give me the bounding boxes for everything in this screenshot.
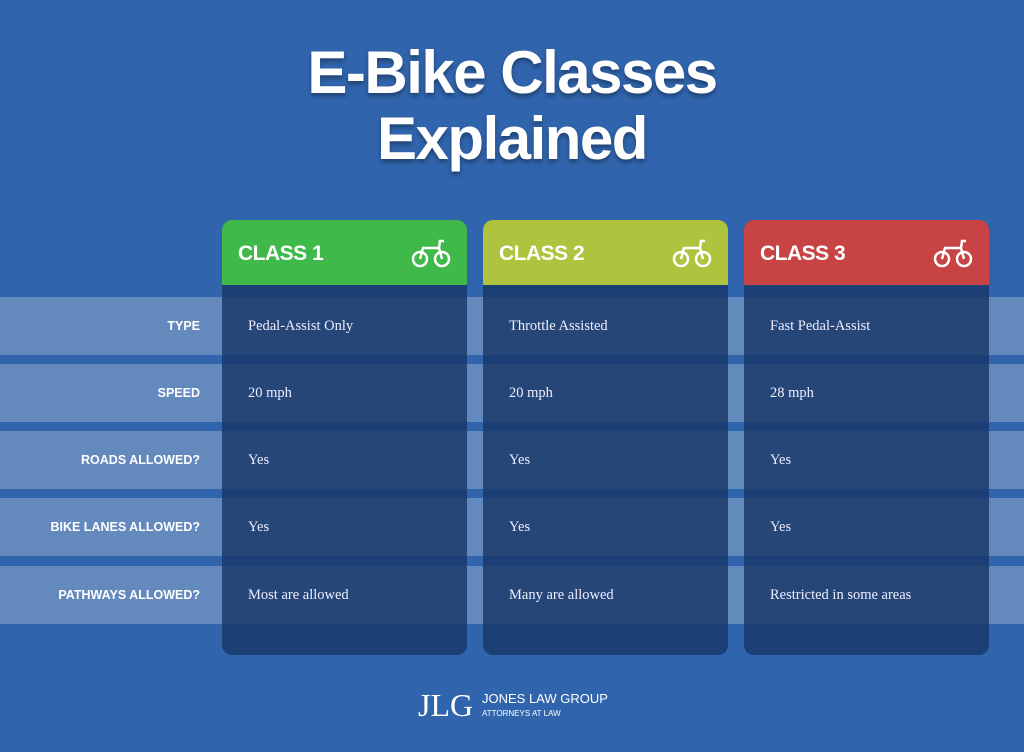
title: Explained — [377, 105, 647, 172]
panel: class 3: 28 mph — [770, 385, 814, 401]
panel: class 1 — [222, 220, 467, 655]
logo — [418, 687, 608, 723]
header: class 3 — [744, 220, 989, 285]
panel: class 3 — [744, 220, 989, 655]
logo: ATTORNEYS AT LAW — [482, 709, 561, 718]
panel: class 2: 20 mph — [509, 385, 553, 401]
panel: class 2 — [483, 220, 728, 655]
logo: JONES LAW GROUP — [482, 691, 608, 706]
panel: class 2: Yes — [509, 452, 530, 468]
panel: class 1: Yes — [248, 519, 269, 535]
row labels — [50, 319, 200, 602]
logo: JLG — [418, 687, 473, 723]
row labels: BIKE LANES ALLOWED? — [50, 520, 200, 534]
header: class 2: CLASS 2 — [499, 242, 584, 265]
panel: class 1: Pedal-Assist Only — [248, 318, 353, 334]
header: class 1 — [222, 220, 467, 285]
row labels: PATHWAYS ALLOWED? — [58, 588, 200, 602]
title: E-Bike Classes — [307, 39, 717, 106]
panel: class 3: Fast Pedal-Assist — [770, 318, 870, 334]
panel: class 1: Most are allowed — [248, 587, 349, 603]
panel: class 1: 20 mph — [248, 385, 292, 401]
panel: class 2: Yes — [509, 519, 530, 535]
row labels: ROADS ALLOWED? — [81, 453, 200, 467]
panel: class 2: Throttle Assisted — [509, 318, 608, 334]
panel: class 3: Yes — [770, 519, 791, 535]
panel: class 3: Yes — [770, 452, 791, 468]
header: class 3: CLASS 3 — [760, 242, 845, 265]
header: class 2 — [483, 220, 728, 285]
row labels: SPEED — [158, 386, 200, 400]
panel: class 2: Many are allowed — [509, 587, 614, 603]
row labels: TYPE — [167, 319, 200, 333]
panel: class 3: Restricted in some areas — [770, 587, 911, 603]
panel: class 1: Yes — [248, 452, 269, 468]
title — [307, 39, 718, 177]
header: class 1: CLASS 1 — [238, 242, 323, 265]
